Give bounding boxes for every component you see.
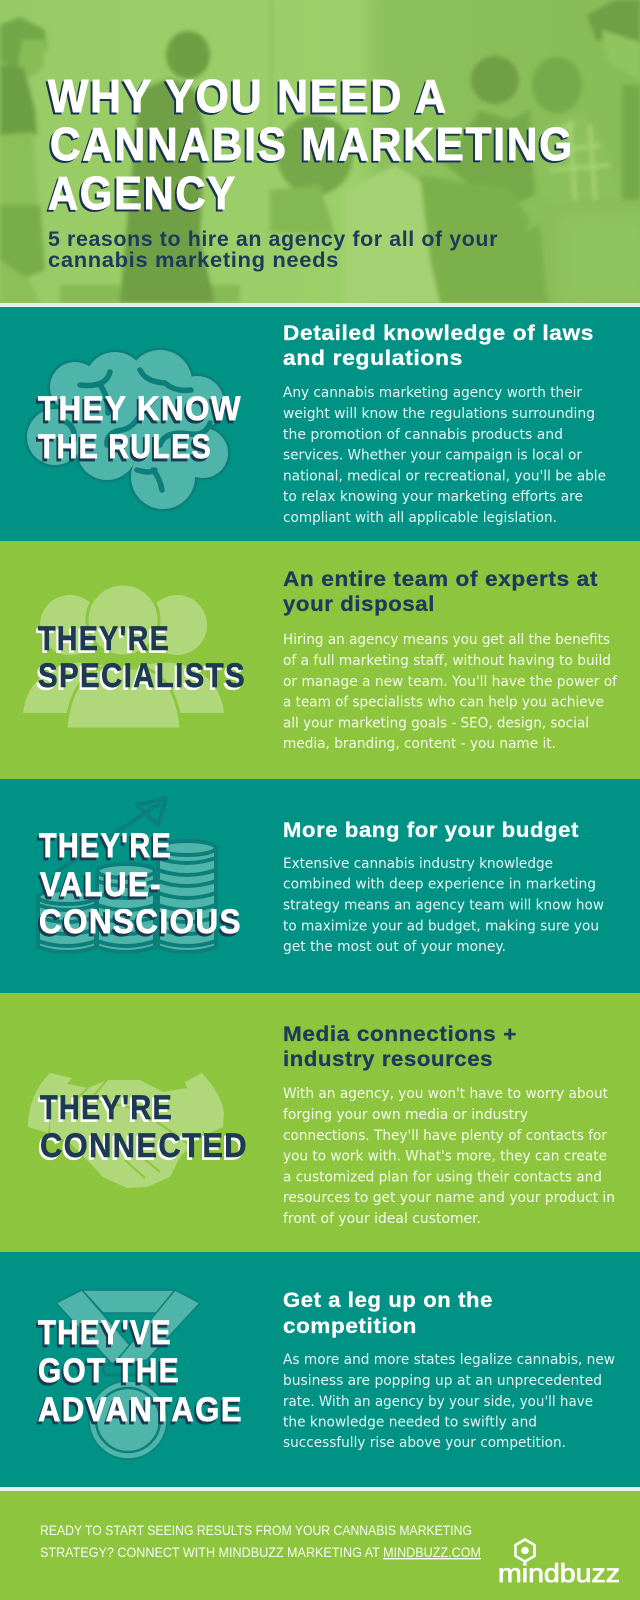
label: they've got the advantage: THEY'VE	[38, 1314, 172, 1352]
body text: specialists: or manage a new team. You'll have the power of	[283, 673, 618, 690]
header photo background	[0, 0, 640, 305]
body text: specialists: of a full marketing staff, without having to build	[283, 652, 611, 669]
body text: connections: connections. They'll have plenty of contacts for	[283, 1127, 607, 1144]
body text: rules: to relax knowing your marketing efforts are	[283, 488, 583, 505]
icon: medal	[56, 1290, 200, 1459]
label: they're specialists: SPECIALISTS	[38, 657, 246, 695]
body text: rules: weight will know the regulations surrounding	[283, 405, 595, 422]
man at top right	[587, 0, 640, 45]
panel: footer call to action	[0, 1491, 640, 1600]
heading: media connections: industry resources	[283, 1047, 493, 1071]
body text: competition: business are popping up at an unprecedented	[283, 1372, 602, 1389]
panel: they're connected	[0, 993, 640, 1252]
icon: team of people	[23, 584, 224, 729]
body text: budget: strategy means an agency team will know how	[283, 896, 604, 914]
left man	[0, 17, 47, 68]
label: they've got the advantage: GOT THE	[38, 1352, 180, 1390]
body text: competition: As more and more states legalize cannabis, new	[283, 1351, 615, 1368]
heading: get a leg up	[283, 1288, 493, 1338]
subtitle: cannabis marketing needs	[48, 248, 339, 272]
body text: rules: Any cannabis marketing agency worth their	[283, 384, 582, 401]
body text: rules: compliant with all applicable legislation.	[283, 509, 557, 526]
body text: specialists	[283, 631, 618, 752]
chair	[475, 225, 548, 303]
centre man	[166, 31, 210, 79]
body text: connections: resources to get your name and your product in	[283, 1189, 615, 1206]
call to action text: STRATEGY? CONNECT WITH MINDBUZZ MARKETING AT MINDBUZZ.COM	[40, 1544, 481, 1560]
panel: they've got the advantage	[0, 1252, 640, 1487]
heading: get a leg up: competition	[283, 1314, 417, 1338]
label: they know the rules: THEY KNOW	[38, 390, 242, 428]
body text: rules: the promotion of cannabis products and	[283, 426, 563, 443]
body text: rules: services. Whether your campaign is local or	[283, 446, 582, 464]
body text: competition: successfully rise above your competition.	[283, 1434, 566, 1451]
body text: connections	[283, 1085, 615, 1227]
label: they know the rules: THE RULES	[38, 428, 212, 466]
heading: more bang: More bang for your budget	[283, 818, 579, 842]
seated person	[277, 115, 353, 195]
title: WHY YOU NEED A	[48, 70, 448, 122]
body text: rules: national, medical or recreational, you'll be able	[283, 468, 606, 484]
body text: budget	[283, 855, 604, 955]
label: they're specialists	[38, 620, 246, 695]
body text: budget: to maximize your ad budget, making sure you	[283, 918, 599, 934]
title	[48, 70, 574, 219]
body text: rules	[283, 384, 606, 526]
person in plaid	[532, 57, 582, 113]
body text: competition: rate. With an agency by your side, you'll have	[283, 1393, 593, 1410]
title: CANNABIS MARKETING	[50, 118, 574, 170]
logo: mindbuzz	[498, 1540, 620, 1588]
panel: they're value-conscious	[0, 779, 640, 993]
subtitle: 5 reasons to hire an agency for all of your	[48, 227, 498, 251]
body text: connections: With an agency, you won't have to worry about	[283, 1085, 608, 1102]
label: they know the rules	[38, 390, 242, 466]
body text: specialists: a team of specialists who can help you achieve	[283, 694, 604, 710]
call to action text	[40, 1522, 481, 1560]
icon: handshake	[28, 1073, 224, 1188]
body text: budget: Extensive cannabis industry knowledge	[283, 855, 553, 872]
body text: connections: forging your own media or industry	[283, 1106, 528, 1123]
body text: specialists: all your marketing goals - SEO, design, social	[283, 714, 589, 732]
body text: connections: front of your ideal customer.	[283, 1210, 481, 1227]
heading: media connections: Media connections +	[283, 1022, 517, 1046]
heading: get a leg up: Get a leg up on the	[283, 1288, 493, 1312]
heading: detailed knowledge	[283, 321, 594, 370]
body text: budget: combined with deep experience in marketing	[283, 876, 596, 892]
heading: media connections	[283, 1022, 517, 1071]
body text: connections: you to work with. What's more, they can create	[283, 1148, 607, 1164]
title: AGENCY	[48, 167, 237, 219]
heading: team of experts	[283, 567, 598, 616]
panel: they're specialists	[0, 541, 640, 779]
body text: budget: get the most out of your money.	[283, 938, 506, 955]
label: they're value-conscious: VALUE-	[40, 866, 162, 904]
label: they're connected: CONNECTED	[40, 1127, 248, 1165]
label: they're connected	[40, 1089, 248, 1165]
icon: brain	[27, 350, 228, 509]
body text: connections: a customized plan for using their contacts and	[283, 1168, 602, 1186]
subtitle	[48, 227, 498, 272]
woman at right	[471, 56, 519, 104]
heading: detailed knowledge: and regulations	[283, 346, 463, 370]
body text: competition: the knowledge needed to swiftly and	[283, 1414, 537, 1430]
label: they're value-conscious: CONSCIOUS	[39, 903, 242, 941]
label: they're value-conscious	[39, 827, 242, 941]
heading: detailed knowledge: Detailed knowledge of laws	[283, 321, 594, 345]
label: they're connected: THEY'RE	[40, 1089, 173, 1127]
icon: coin stacks with rising arrow	[38, 798, 216, 952]
header panel	[0, 0, 640, 305]
panel: they know the rules	[0, 307, 640, 541]
heading: team of experts: An entire team of experts at	[283, 567, 598, 591]
label: they've got the advantage: ADVANTAGE	[38, 1391, 243, 1429]
logo: mindbuzz: mindbuzz	[498, 1558, 620, 1588]
call to action text: READY TO START SEEING RESULTS FROM YOUR CANNABIS MARKETING	[40, 1522, 472, 1538]
body text: specialists: Hiring an agency means you get all the benefits	[283, 631, 610, 648]
label: they're specialists: THEY'RE	[38, 620, 170, 658]
label: they're value-conscious: THEY'RE	[39, 827, 172, 865]
heading: team of experts: your disposal	[283, 592, 435, 616]
body text: competition	[283, 1351, 615, 1451]
body text: specialists: media, branding, content - you name it.	[283, 735, 556, 752]
label: they've got the advantage	[38, 1314, 243, 1429]
